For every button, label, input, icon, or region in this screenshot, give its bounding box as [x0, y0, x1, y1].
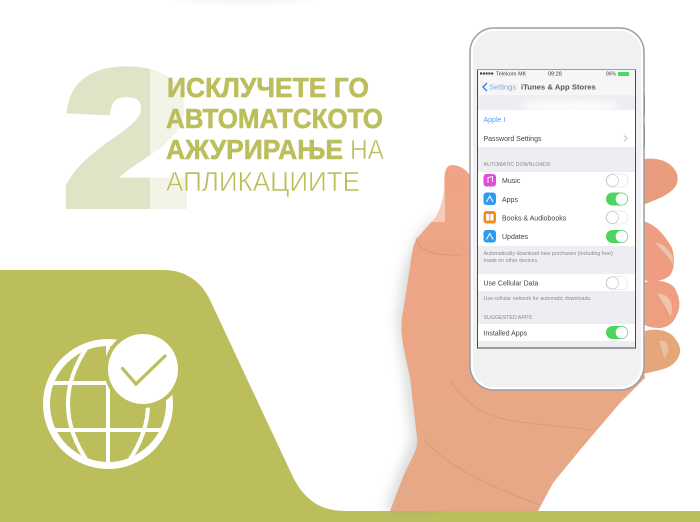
hand shadow: [385, 215, 440, 510]
status bar and navigation: [478, 70, 635, 95]
title: [166, 72, 384, 197]
cellular description: Use cellular network for automatic downloads.: [484, 296, 592, 302]
automatic downloads list: Apps: [502, 197, 518, 204]
status bar and navigation: iTunes & App Stores: [521, 82, 596, 92]
finger one: [643, 159, 678, 205]
phone: [470, 28, 644, 390]
status bar and navigation: 09:28: [548, 72, 562, 78]
installed apps row: Installed Apps: [484, 330, 528, 338]
icon: updates: [484, 230, 496, 242]
account rows: Apple I: [484, 117, 505, 124]
icon: music: [484, 174, 496, 186]
thumb highlight patch: [426, 172, 445, 222]
title: АЖУРИРАЊЕ: [166, 134, 343, 165]
toggles: [606, 174, 628, 243]
icon: books: [484, 211, 496, 224]
finger four: [643, 330, 680, 374]
phone side buttons: [644, 95, 646, 147]
green background shape: [0, 270, 700, 522]
icon: globe with check mark: [46, 330, 182, 468]
phone screen: [478, 70, 636, 348]
automatic downloads list: Music: [502, 178, 521, 185]
status bar and navigation: Settings: [489, 82, 516, 92]
finger two: [643, 221, 674, 281]
title: АПЛИКАЦИИТЕ: [166, 166, 360, 197]
title: АВТОМАТСКОТО: [166, 103, 383, 134]
cellular data row: [478, 274, 635, 291]
account rows: Password Settings: [484, 136, 542, 143]
automatic downloads header: AUTOMATIC DOWNLOADS: [484, 162, 551, 168]
cellular data row: Use Cellular Data: [484, 280, 538, 288]
description text: Automatically download new purchases (including free): [484, 251, 613, 257]
finger three: [639, 281, 679, 328]
palm and thumb: [390, 165, 645, 511]
automatic downloads list: Updates: [502, 234, 529, 241]
account rows: [478, 100, 635, 147]
installed apps row: [478, 324, 635, 341]
description text: [484, 251, 613, 264]
big number 2: 2: [64, 33, 190, 245]
phone body: [470, 28, 644, 390]
status bar and navigation: 96%: [606, 72, 617, 78]
title: НА: [350, 134, 384, 165]
automatic downloads list: Books & Audiobooks: [502, 216, 567, 222]
description text: made on other devices.: [484, 258, 539, 264]
top shadow: [177, 0, 313, 2]
big number 2: 2: [64, 33, 190, 245]
big number 2: [66, 66, 187, 209]
title: ИСКЛУЧЕТЕ ГО: [167, 72, 369, 103]
hand holding phone: [390, 159, 680, 511]
status bar and navigation: Telekom MK: [496, 72, 527, 78]
automatic downloads list: [478, 172, 635, 246]
suggested apps header: SUGGESTED APPS: [484, 315, 533, 321]
icon: apps: [484, 192, 496, 205]
palm crease: [416, 237, 590, 505]
